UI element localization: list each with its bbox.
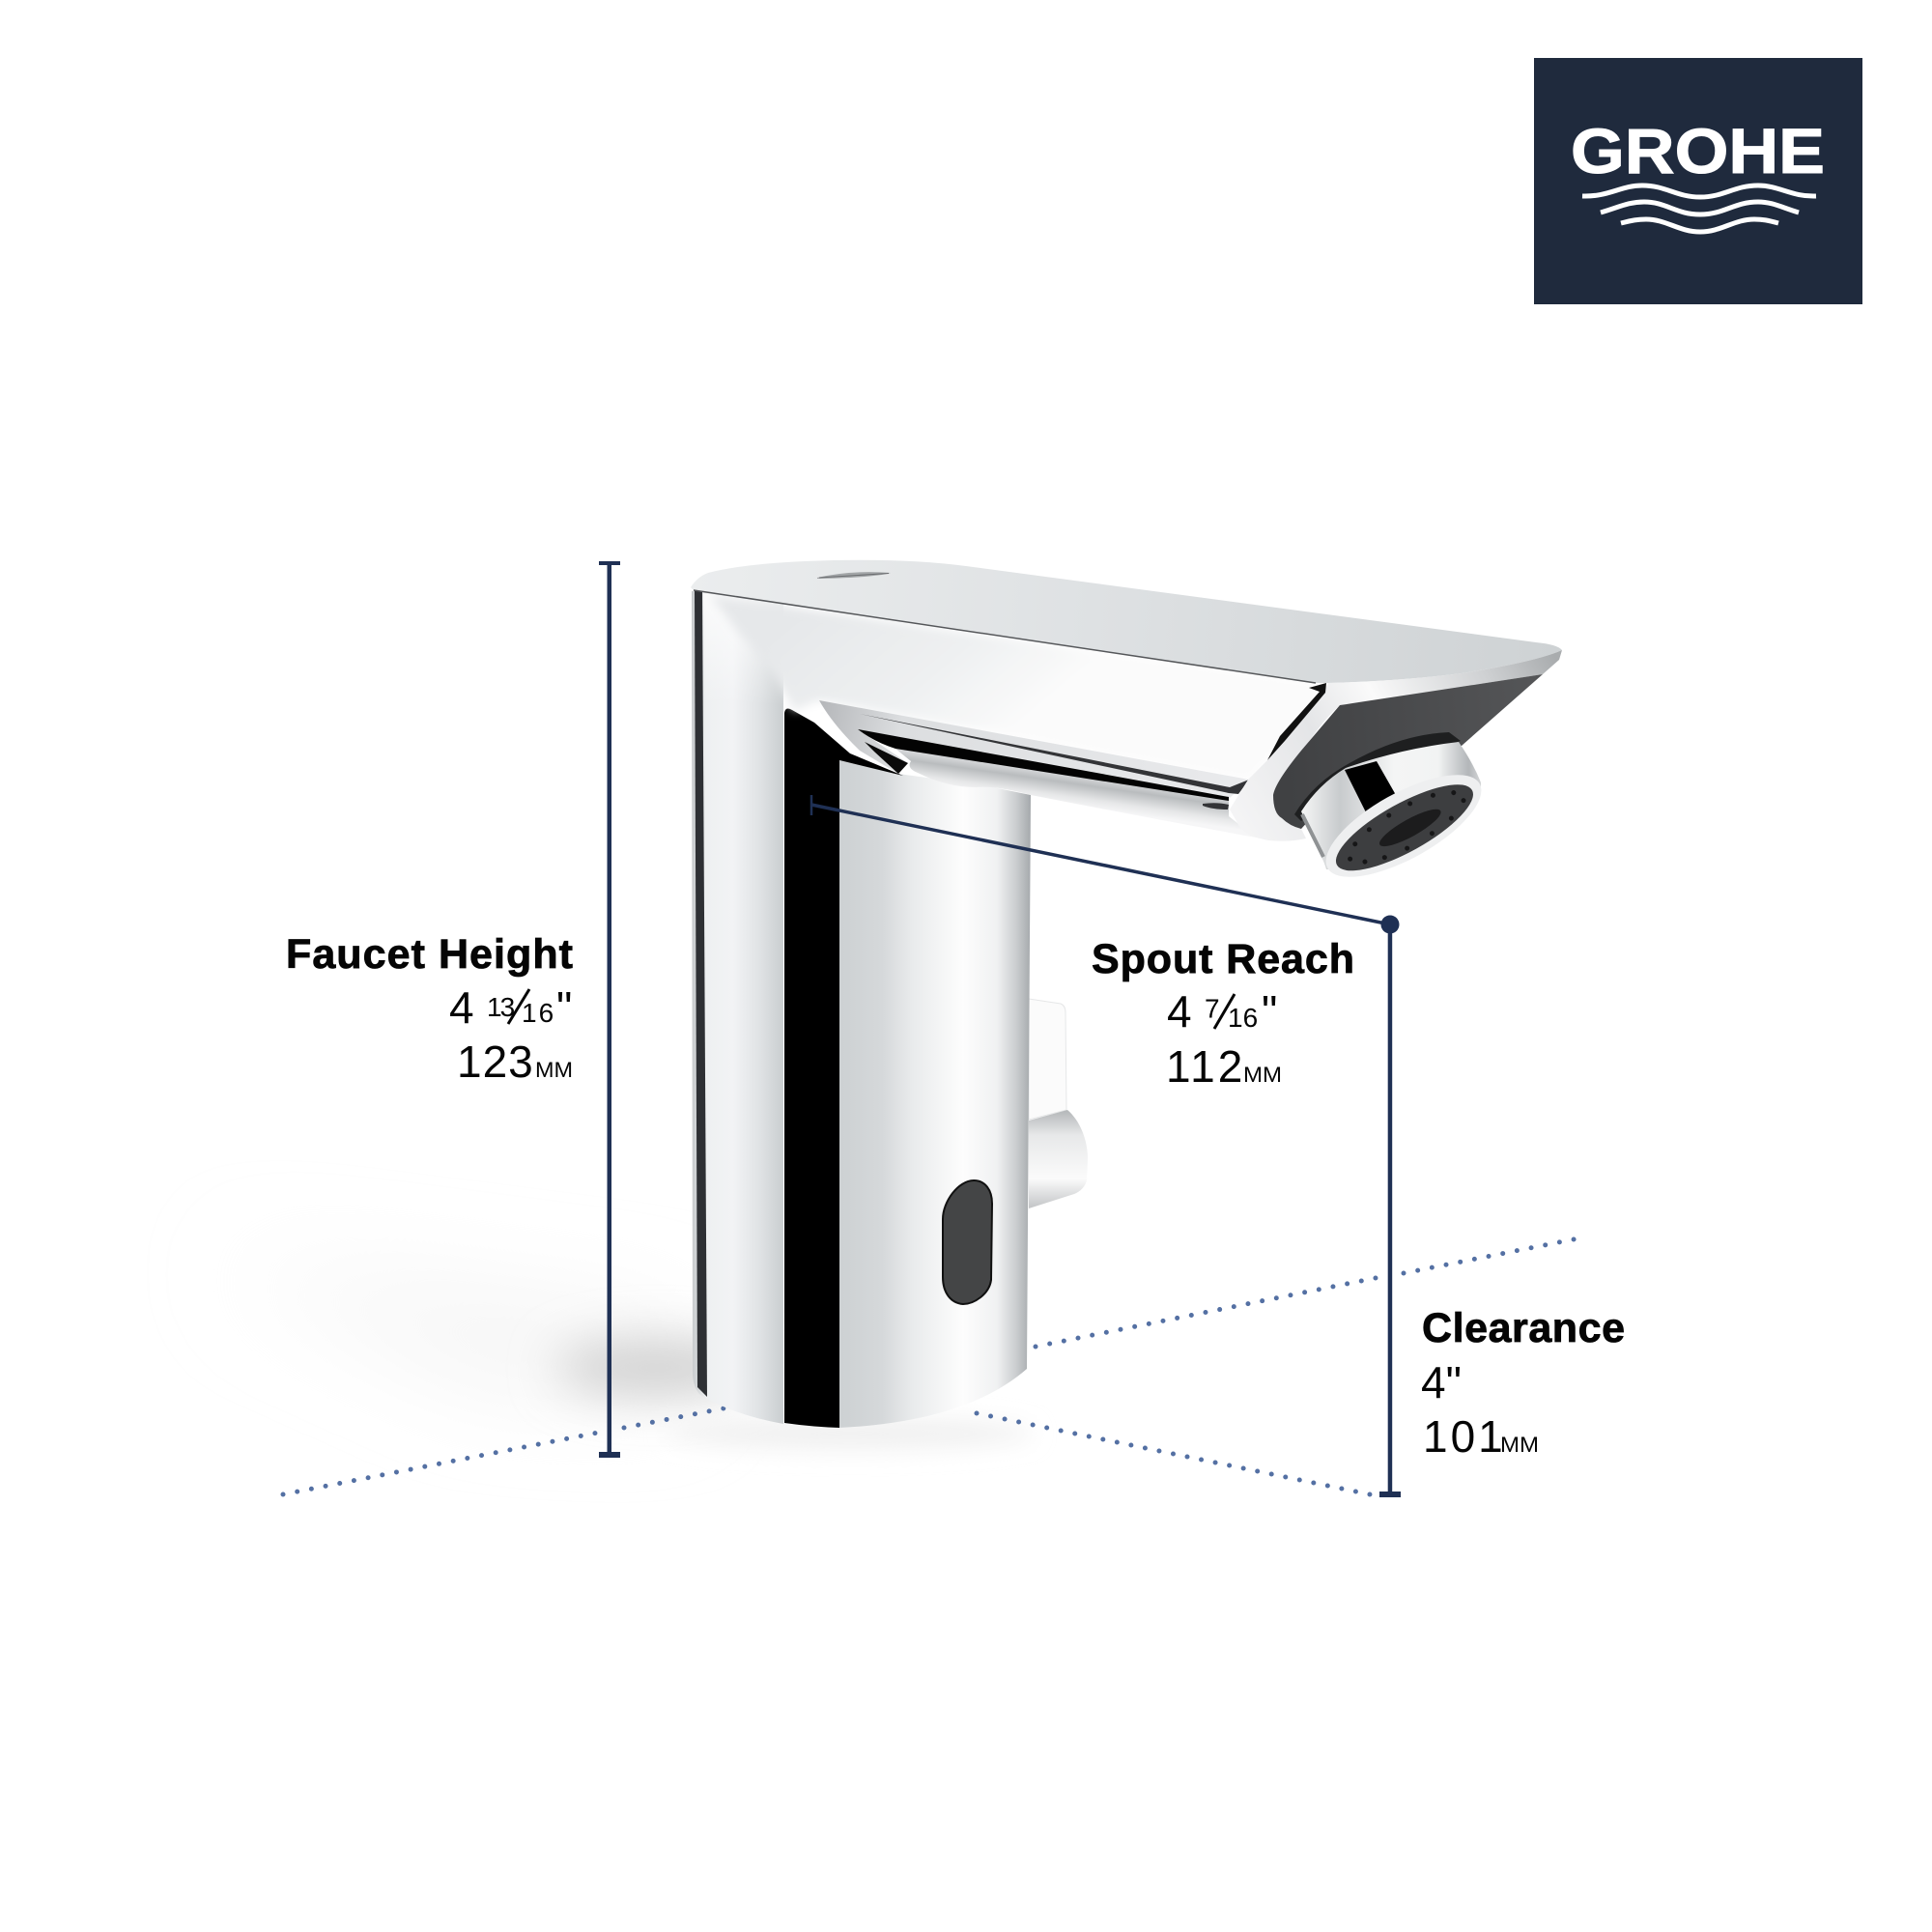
label: clearance: Clearance (1422, 1305, 1625, 1351)
label: faucet height: 4 (449, 982, 474, 1033)
dotted floor lines (283, 1239, 1576, 1494)
spout reach dimension line (811, 795, 1399, 933)
spout underside slot (1203, 803, 1229, 810)
tiny brand mark (817, 572, 891, 579)
label: faucet height: 123 (457, 1037, 534, 1087)
label: clearance: MM (1500, 1433, 1539, 1457)
label: spout reach: MM (1243, 1063, 1282, 1087)
faucet column (692, 591, 783, 1424)
top edge line (694, 590, 1316, 683)
faucet cylinder (838, 760, 1031, 1428)
label: spout reach: 7 (1205, 993, 1220, 1024)
label: faucet height: 16 (522, 998, 555, 1028)
floor shadow (222, 1265, 1034, 1449)
sensor window (943, 1180, 992, 1304)
GROHE logo: GROHE (1571, 115, 1825, 186)
label: faucet height (286, 931, 573, 1087)
label: faucet height: MM (535, 1058, 573, 1082)
label: faucet height: " (556, 982, 572, 1033)
upper front face (710, 595, 1323, 780)
spout joint black marks (865, 742, 908, 774)
GROHE logo (1534, 58, 1862, 304)
spout lower chrome (895, 749, 1256, 838)
clearance dimension line (1379, 924, 1401, 1497)
label: clearance: 101 (1423, 1411, 1506, 1462)
front rim frame (1230, 650, 1562, 841)
aerator black reflection (1345, 761, 1396, 814)
lip dark line (860, 714, 1249, 794)
label: clearance (1421, 1305, 1625, 1462)
dark left edge strip (695, 590, 707, 1397)
label: faucet height: 13 (487, 992, 515, 1022)
black reflection strip (784, 709, 903, 1428)
label: spout reach: " (1262, 986, 1277, 1037)
spout black streak (858, 729, 1229, 801)
label: spout reach: 4 (1167, 986, 1192, 1037)
top surface (691, 560, 1562, 683)
label: spout reach (1092, 936, 1354, 1092)
aerator collar (1294, 732, 1461, 821)
spout upper lip (819, 700, 1249, 799)
column highlight (703, 593, 783, 708)
label: spout reach: 16 (1228, 1003, 1258, 1033)
aerator outlet face (1312, 755, 1495, 896)
dark corner accent (1267, 683, 1326, 760)
faucet (691, 560, 1562, 1428)
label: faucet height: Faucet Height (286, 931, 573, 978)
label: spout reach: 112 (1166, 1041, 1245, 1092)
label: clearance: 4" (1421, 1357, 1462, 1407)
label: spout reach: Spout Reach (1092, 936, 1354, 982)
dark spout panel (1273, 674, 1543, 829)
faucet height dimension line (599, 561, 620, 1458)
aerator thin rim (1302, 814, 1323, 857)
aerator body (1301, 742, 1481, 869)
sensor lever at the back (1029, 999, 1088, 1208)
